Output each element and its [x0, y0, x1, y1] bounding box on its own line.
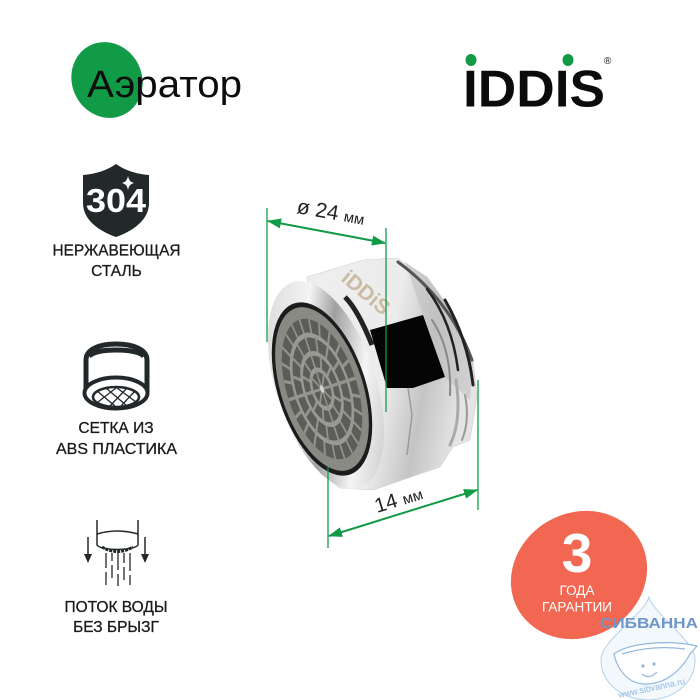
aerator thread — [398, 262, 473, 445]
label: поток воды без брызг — [64, 599, 168, 636]
dimension: diameter 24 mm — [267, 195, 386, 412]
icon: flow without splashes — [84, 520, 149, 586]
title text: Аэратор — [87, 64, 242, 106]
aerator engraved logo: iDDiS — [337, 266, 394, 320]
watermark drop — [601, 597, 695, 700]
watermark url: www.sibvanna.ru — [616, 676, 686, 700]
label: сетка из ABS пластика: СЕТКА ИЗ — [78, 420, 154, 437]
watermark bathtub — [614, 643, 697, 684]
label: нержавеющая сталь: СТАЛЬ — [91, 263, 142, 280]
logo registered mark: ® — [604, 56, 612, 67]
logo wordmark: IDDIS — [463, 60, 605, 118]
product photo: aerator — [245, 258, 477, 503]
badge caption: ГАРАНТИИ — [542, 600, 612, 614]
label: сетка из ABS пластика — [56, 420, 178, 458]
aerator dark ring highlight — [345, 297, 372, 345]
aerator upper band shade — [405, 262, 473, 400]
dimension label: ø 24 мм — [295, 195, 367, 230]
feature: water flow — [64, 520, 168, 636]
feature: stainless steel 304 — [52, 164, 180, 280]
label: сетка из ABS пластика: ABS ПЛАСТИКА — [56, 441, 178, 458]
aerator notch — [407, 388, 412, 455]
icon: shield 304: 304 — [86, 182, 147, 219]
dimension: length 14 mm — [328, 380, 478, 548]
title: Аэратор — [59, 30, 242, 130]
warranty badge — [487, 486, 671, 664]
logo green dots — [466, 54, 574, 66]
watermark: Сибванна — [600, 597, 698, 700]
label: поток воды без брызг: ПОТОК ВОДЫ — [64, 599, 168, 616]
icon: aerator mesh — [84, 344, 148, 408]
aerator black facet — [370, 315, 445, 388]
title green blob — [59, 30, 155, 130]
aerator body — [307, 258, 477, 490]
aerator front ring — [245, 267, 407, 503]
feature: ABS mesh — [56, 344, 178, 458]
dimension lines — [328, 380, 478, 548]
label: поток воды без брызг: БЕЗ БРЫЗГ — [73, 619, 160, 636]
aerator dark gasket — [252, 290, 392, 488]
badge caption — [542, 583, 612, 614]
dimension label: 14 мм — [372, 481, 425, 518]
badge caption: ГОДА — [560, 583, 594, 598]
badge blob — [487, 486, 671, 664]
aerator mesh — [257, 296, 387, 482]
watermark name: СИБВАННА — [600, 615, 698, 632]
label: нержавеющая сталь — [52, 242, 180, 280]
logo: IDDIS — [463, 54, 612, 118]
badge number: 3 — [562, 522, 592, 584]
dimension lines — [267, 208, 386, 412]
label: нержавеющая сталь: НЕРЖАВЕЮЩАЯ — [52, 242, 180, 260]
